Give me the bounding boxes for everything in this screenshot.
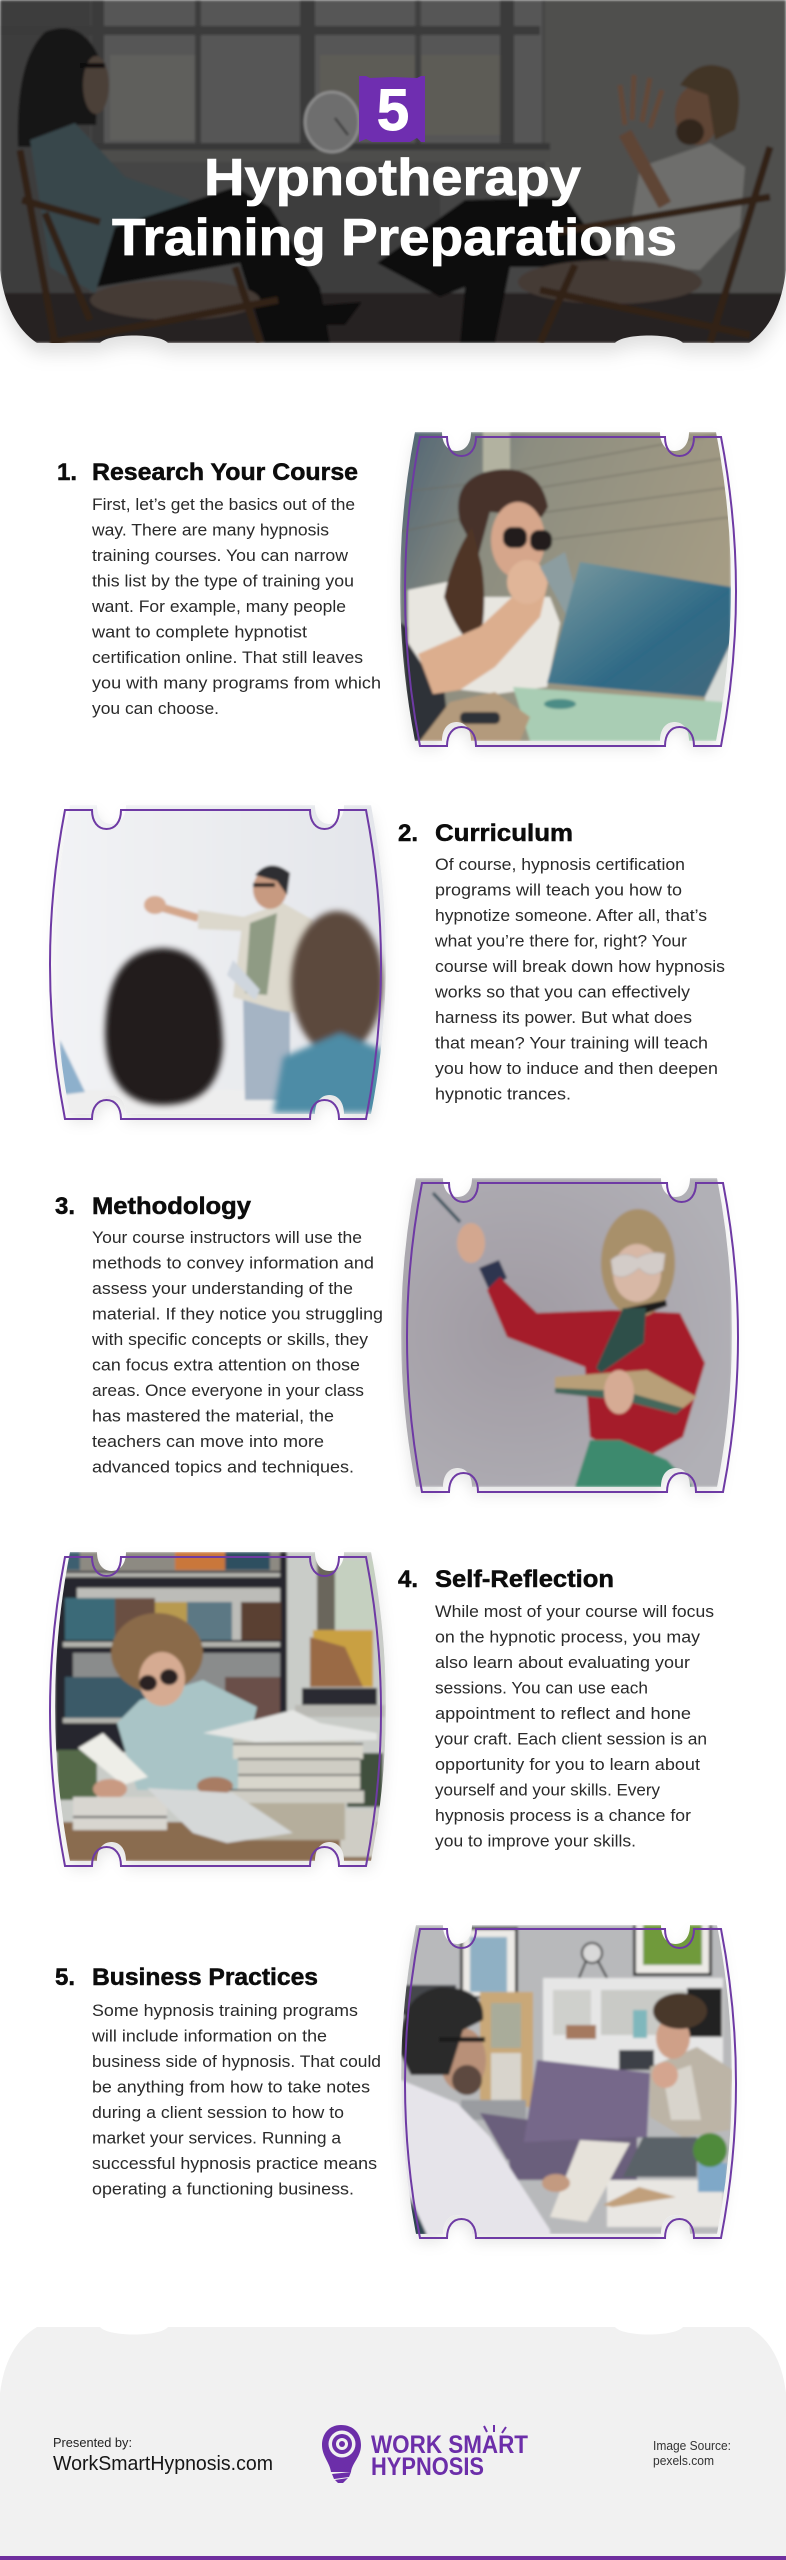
- body text: teachers can move into more: [92, 1433, 324, 1451]
- body text: Some hypnosis training programs: [92, 2002, 358, 2020]
- clock: [305, 92, 359, 152]
- body text: want to complete hypnotist: [91, 624, 307, 642]
- photo: woman frowning at laptop: [400, 432, 731, 741]
- heading: 4.: [398, 1566, 418, 1593]
- presented by: WorkSmartHypnosis.com: [53, 2453, 273, 2475]
- number badge: 5: [377, 78, 409, 143]
- body text: this list by the type of training you: [92, 572, 354, 590]
- body text: successful hypnosis practice means: [92, 2155, 377, 2173]
- body text: [91, 496, 381, 718]
- body text: hypnotic trances.: [435, 1086, 571, 1104]
- step 2: curriculum: [50, 805, 725, 1119]
- body text: [434, 856, 725, 1104]
- step 1: research your course: [57, 432, 736, 746]
- step 5: business practices: [55, 1925, 736, 2238]
- body text: business side of hypnosis. That could: [92, 2053, 381, 2071]
- image source: [653, 2439, 731, 2468]
- body text: will include information on the: [91, 2028, 327, 2046]
- decorative frame outline: [405, 1929, 736, 2238]
- image source: pexels.com: [653, 2454, 714, 2468]
- footer panel: [0, 2327, 786, 2560]
- body text: course will break down how hypnosis: [435, 958, 725, 976]
- number badge: [359, 76, 425, 143]
- body text: Of course, hypnosis certification: [435, 856, 685, 874]
- body text: While most of your course will focus: [435, 1603, 714, 1621]
- photo: presenter in front of audience: [55, 805, 386, 1114]
- body text: yourself and your skills. Every: [435, 1782, 661, 1800]
- heading: 3.: [55, 1193, 75, 1220]
- step 4: self-reflection: [50, 1552, 714, 1866]
- heading: 5.: [55, 1964, 75, 1991]
- logo wordmark: HYPNOSIS: [371, 2453, 484, 2481]
- title: Hypnotherapy: [204, 149, 581, 207]
- icon: spiral light bulb: [322, 2425, 361, 2483]
- body text: operating a functioning business.: [92, 2180, 354, 2198]
- title: Training Preparations: [112, 209, 677, 267]
- photo: client session in living room: [400, 1925, 733, 2235]
- logo: [322, 2425, 528, 2483]
- body text: Your course instructors will use the: [92, 1229, 362, 1247]
- body text: areas. Once everyone in your class: [92, 1382, 364, 1400]
- body text: has mastered the material, the: [92, 1408, 334, 1426]
- heading: Research Your Course: [92, 459, 358, 486]
- body text: opportunity for you to learn about: [435, 1756, 700, 1774]
- body text: certification online. That still leaves: [92, 649, 363, 667]
- heading: 2.: [398, 820, 418, 847]
- step 3: methodology: [55, 1178, 738, 1492]
- body text: [91, 2002, 381, 2198]
- body text: market your services. Running a: [92, 2130, 342, 2148]
- decorative frame outline: [407, 1183, 738, 1492]
- body text: what you’re there for, right? Your: [434, 932, 688, 950]
- body text: assess your understanding of the: [92, 1280, 353, 1298]
- woman: [18, 28, 98, 147]
- body text: First, let’s get the basics out of the: [92, 496, 355, 514]
- body text: sessions. You can use each: [435, 1680, 648, 1698]
- man: [620, 143, 745, 270]
- body text: you to improve your skills.: [435, 1832, 636, 1850]
- heading: Business Practices: [92, 1964, 318, 1991]
- body text: want. For example, many people: [91, 598, 346, 616]
- body text: methods to convey information and: [92, 1254, 374, 1272]
- body text: [435, 1603, 714, 1850]
- body text: way. There are many hypnosis: [91, 522, 329, 540]
- body text: advanced topics and techniques.: [92, 1458, 354, 1476]
- body text: material. If they notice you struggling: [92, 1306, 383, 1324]
- header banner: [0, 0, 786, 343]
- body text: you with many programs from which: [92, 674, 381, 692]
- body text: you can choose.: [92, 700, 219, 718]
- footer background: [0, 2327, 786, 2560]
- body text: your craft. Each client session is an: [435, 1730, 707, 1748]
- heading: Methodology: [92, 1193, 252, 1220]
- body text: hypnosis process is a chance for: [435, 1807, 692, 1825]
- decorative frame outline: [405, 437, 736, 746]
- photo: teacher with pointer and book: [401, 1178, 732, 1487]
- body text: during a client session to how to: [92, 2104, 344, 2122]
- logo wordmark: WORK SMART: [371, 2431, 528, 2459]
- body text: training courses. You can narrow: [92, 547, 348, 565]
- body text: [91, 1229, 383, 1476]
- body text: also learn about evaluating your: [435, 1654, 691, 1672]
- heading: 1.: [57, 459, 77, 486]
- image source: Image Source:: [653, 2439, 731, 2453]
- presented by: [53, 2435, 273, 2475]
- purple bottom bar: [0, 2556, 786, 2560]
- decorative frame outline: [50, 1557, 381, 1866]
- body text: with specific concepts or skills, they: [91, 1331, 369, 1349]
- body text: you how to induce and then deepen: [435, 1060, 718, 1078]
- decorative frame outline: [50, 810, 381, 1119]
- body text: be anything from how to take notes: [92, 2078, 370, 2096]
- heading: Curriculum: [435, 820, 573, 847]
- photo: student surrounded by books: [55, 1552, 386, 1861]
- body text: works so that you can effectively: [434, 984, 691, 1002]
- body text: on the hypnotic process, you may: [435, 1628, 701, 1646]
- body text: harness its power. But what does: [435, 1009, 692, 1027]
- presented by: Presented by:: [53, 2435, 132, 2450]
- body text: can focus extra attention on those: [92, 1356, 360, 1374]
- logo wordmark: [371, 2425, 528, 2481]
- body text: programs will teach you how to: [435, 882, 682, 900]
- body text: appointment to reflect and hone: [435, 1705, 691, 1723]
- banner photo: hypnotherapy session: [0, 0, 786, 343]
- body text: hypnotize someone. After all, that’s: [435, 907, 707, 925]
- heading: Self-Reflection: [435, 1566, 614, 1593]
- body text: that mean? Your training will teach: [435, 1034, 708, 1052]
- title: [112, 149, 677, 267]
